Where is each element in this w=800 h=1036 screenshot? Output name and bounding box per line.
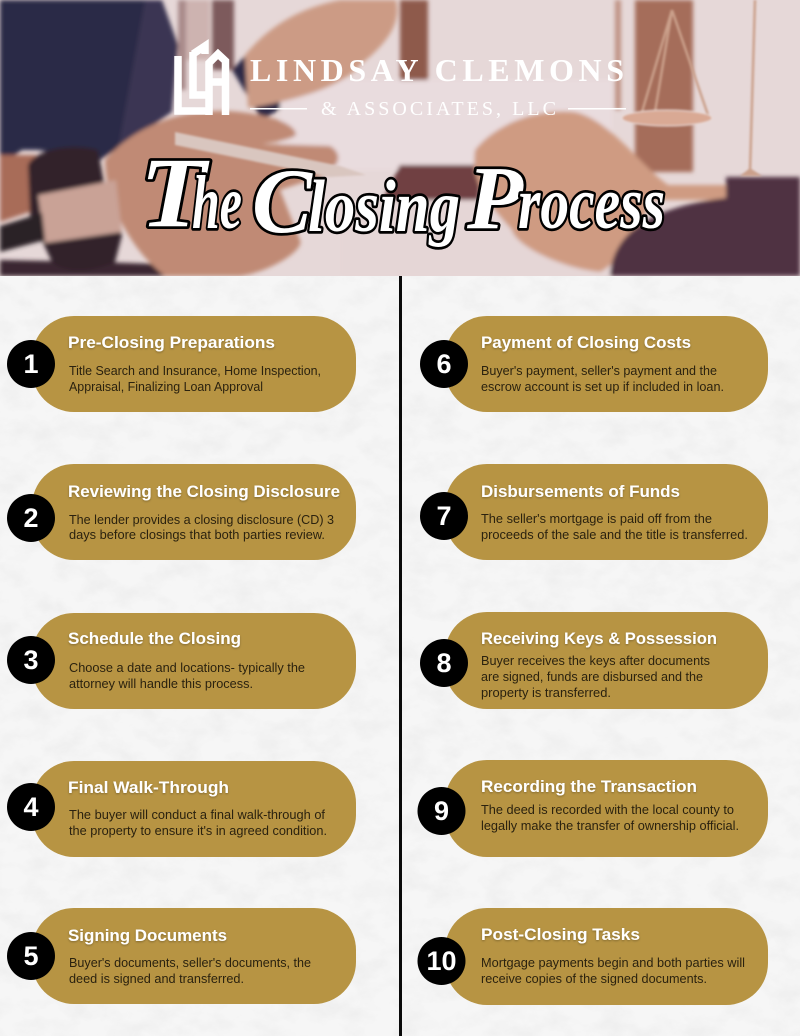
step 7: Disbursements of Funds	[481, 483, 680, 501]
step 6: escrow account is set up if included in loan.	[481, 380, 724, 394]
step 4	[7, 761, 356, 857]
step 2: days before closings that both parties review.	[69, 528, 325, 542]
step 5: deed is signed and transferred.	[69, 972, 244, 986]
step 10: Mortgage payments begin and both parties will	[481, 956, 745, 970]
step 9: legally make the transfer of ownership official.	[481, 819, 739, 833]
step 8: property is transferred.	[481, 686, 611, 700]
step 6	[420, 316, 768, 412]
logo wordmark: & ASSOCIATES, LLC	[321, 98, 556, 120]
step 10	[418, 908, 768, 1005]
step 1: Title Search and Insurance, Home Inspection,	[69, 364, 321, 378]
step 9: The deed is recorded with the local county to	[481, 803, 734, 817]
step 2	[7, 464, 356, 560]
step 7: proceeds of the sale and the title is transferred.	[481, 528, 748, 542]
step 5	[7, 908, 356, 1004]
step 4: The buyer will conduct a final walk-through of	[69, 808, 326, 822]
step 7: The seller's mortgage is paid off from the	[481, 512, 712, 526]
step 2: The lender provides a closing disclosure (CD) 3	[69, 513, 334, 527]
step 5: Signing Documents	[68, 927, 227, 945]
step 1: Pre-Closing Preparations	[68, 334, 275, 352]
step 3: attorney will handle this process.	[69, 677, 253, 691]
title: T	[140, 137, 210, 248]
step 7: 7	[436, 501, 452, 531]
step 1: Appraisal, Finalizing Loan Approval	[69, 380, 263, 394]
step 4: Final Walk-Through	[68, 779, 229, 797]
step 3: 3	[23, 645, 39, 675]
step 5: Buyer's documents, seller's documents, the	[69, 956, 311, 970]
title: rocess	[518, 163, 665, 245]
title: losing	[308, 166, 460, 248]
step 9: Recording the Transaction	[481, 778, 697, 796]
logo wordmark	[250, 52, 626, 120]
title: P	[466, 149, 524, 248]
step 8: Buyer receives the keys after documents	[481, 654, 710, 668]
step 10: 10	[426, 946, 457, 976]
step 9: 9	[434, 796, 449, 826]
step 5: 5	[23, 941, 39, 971]
step 4: 4	[23, 792, 39, 822]
step 8: 8	[436, 648, 452, 678]
title: he	[192, 161, 242, 245]
step 10: receive copies of the signed documents.	[481, 972, 707, 986]
step 6: 6	[436, 349, 452, 379]
step 4: the property to ensure it's in agreed condition.	[69, 824, 327, 838]
logo: LCA house mark	[178, 46, 226, 115]
step 8	[420, 612, 768, 709]
title: C	[252, 150, 314, 252]
step 8: Receiving Keys & Possession	[481, 630, 717, 648]
step 6: Payment of Closing Costs	[481, 334, 691, 352]
step 2: Reviewing the Closing Disclosure	[68, 483, 340, 501]
step 9	[418, 760, 768, 857]
step 1	[7, 316, 356, 412]
step 8: are signed, funds are disbursed and the	[481, 670, 703, 684]
center divider	[399, 276, 402, 1036]
step 3: Choose a date and locations- typically the	[69, 661, 305, 675]
step 10: Post-Closing Tasks	[481, 926, 640, 944]
step 2: 2	[23, 503, 39, 533]
step 1: 1	[23, 349, 39, 379]
step 7	[420, 464, 768, 560]
step 6: Buyer's payment, seller's payment and the	[481, 364, 717, 378]
logo wordmark: LINDSAY CLEMONS	[250, 52, 624, 88]
title	[140, 137, 665, 252]
step 3	[7, 613, 356, 709]
step 3: Schedule the Closing	[68, 630, 241, 648]
header photo: closing table with gavel, hands and scales	[0, 0, 800, 276]
